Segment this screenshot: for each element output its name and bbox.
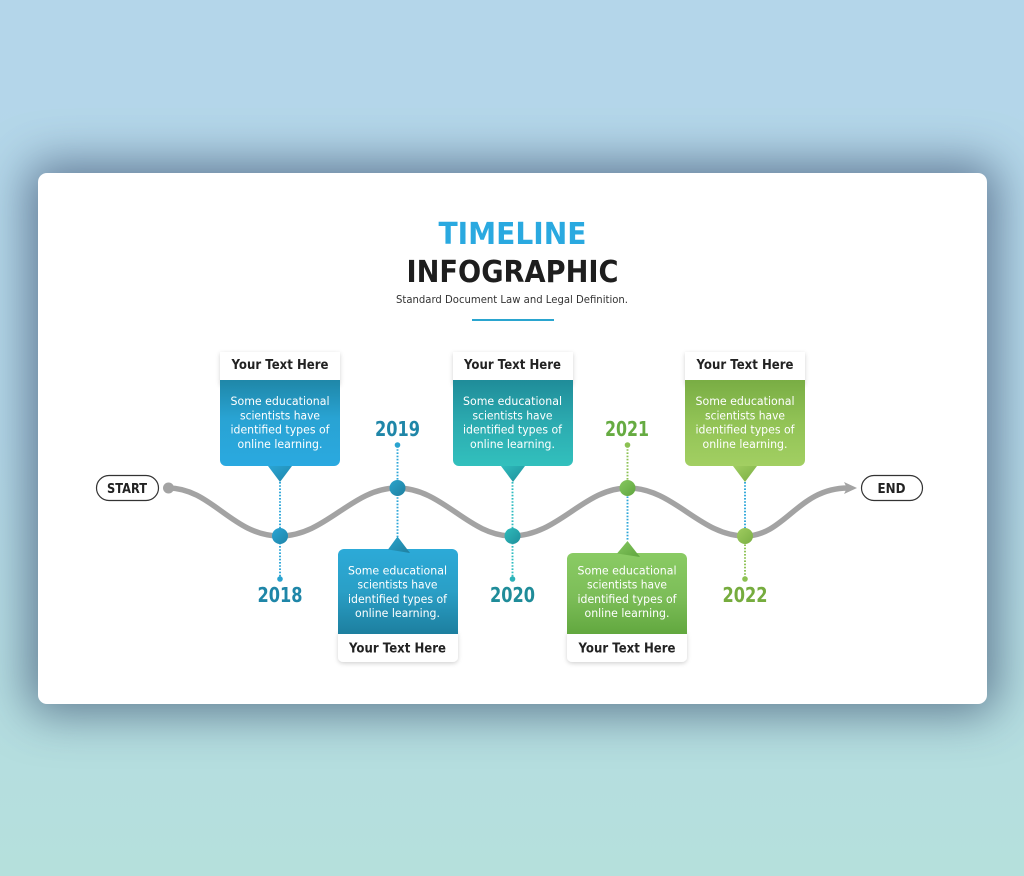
callout: 2021: online learning. [584, 606, 670, 620]
callout: 2021: Some educational [578, 564, 676, 578]
title: INFOGRAPHIC [406, 255, 618, 290]
year: 2022: 2022 [722, 583, 768, 607]
panel: white card [38, 173, 987, 704]
node: 2018 [272, 528, 288, 544]
callout: 2020: online learning. [470, 437, 555, 451]
year: 2019: 2019 [375, 417, 420, 441]
title: TIMELINE [438, 217, 586, 252]
callout: 2019: Some educational [348, 564, 447, 578]
node: 2021 [620, 480, 636, 496]
callout: 2020: Your Text Here [463, 358, 561, 373]
callout: 2018: scientists have [240, 408, 320, 422]
callout: 2019: identified types of [348, 592, 448, 606]
subtitle: Standard Document Law and Legal Definition. [396, 294, 628, 306]
year: 2021: 2021 [605, 417, 649, 441]
callout: 2021: Your Text Here [578, 642, 676, 656]
callout: 2018: online learning. [238, 437, 322, 451]
connector: 2019 [395, 442, 400, 537]
callout: 2018 [220, 352, 340, 482]
title [406, 217, 618, 290]
callout: 2019: scientists have [358, 578, 438, 592]
callout: 2020: Some educational [463, 394, 562, 408]
callout: 2019: Your Text Here [348, 642, 446, 656]
node: 2020 [504, 528, 520, 544]
connector: 2018 [277, 482, 283, 582]
callout: 2018: Some educational [230, 394, 330, 408]
connector: 2022 [742, 482, 748, 582]
callout: 2021: scientists have [587, 578, 667, 592]
callout: 2022: online learning. [702, 437, 788, 451]
year: 2020: 2020 [490, 583, 535, 607]
callout: 2022: Your Text Here [696, 358, 794, 373]
callout: 2019: online learning. [355, 606, 440, 620]
connector: 2020 [510, 482, 515, 582]
label: START: START [107, 482, 147, 497]
label: END [862, 476, 922, 500]
year: 2018: 2018 [258, 583, 302, 607]
connector: 2021 [625, 442, 630, 541]
callout: 2022 [685, 352, 805, 482]
callout: 2021 [567, 541, 687, 662]
callout: 2020 [453, 352, 573, 482]
callout: 2019 [338, 536, 458, 662]
node: 2019 [390, 480, 406, 496]
callout: 2018: identified types of [230, 422, 330, 436]
node: 2022 [737, 528, 753, 544]
title underline [472, 319, 554, 321]
label: END: END [878, 482, 906, 497]
curve: timeline path with arrow [163, 482, 857, 536]
label: START [96, 476, 158, 500]
callout: 2020: identified types of [463, 422, 563, 436]
callout: 2021: identified types of [578, 592, 677, 606]
callout: 2022: scientists have [705, 408, 785, 422]
callout: 2020: scientists have [472, 408, 552, 422]
callout: 2022: Some educational [696, 394, 794, 408]
callout: 2018: Your Text Here [231, 358, 329, 373]
callout: 2022: identified types of [696, 422, 795, 436]
